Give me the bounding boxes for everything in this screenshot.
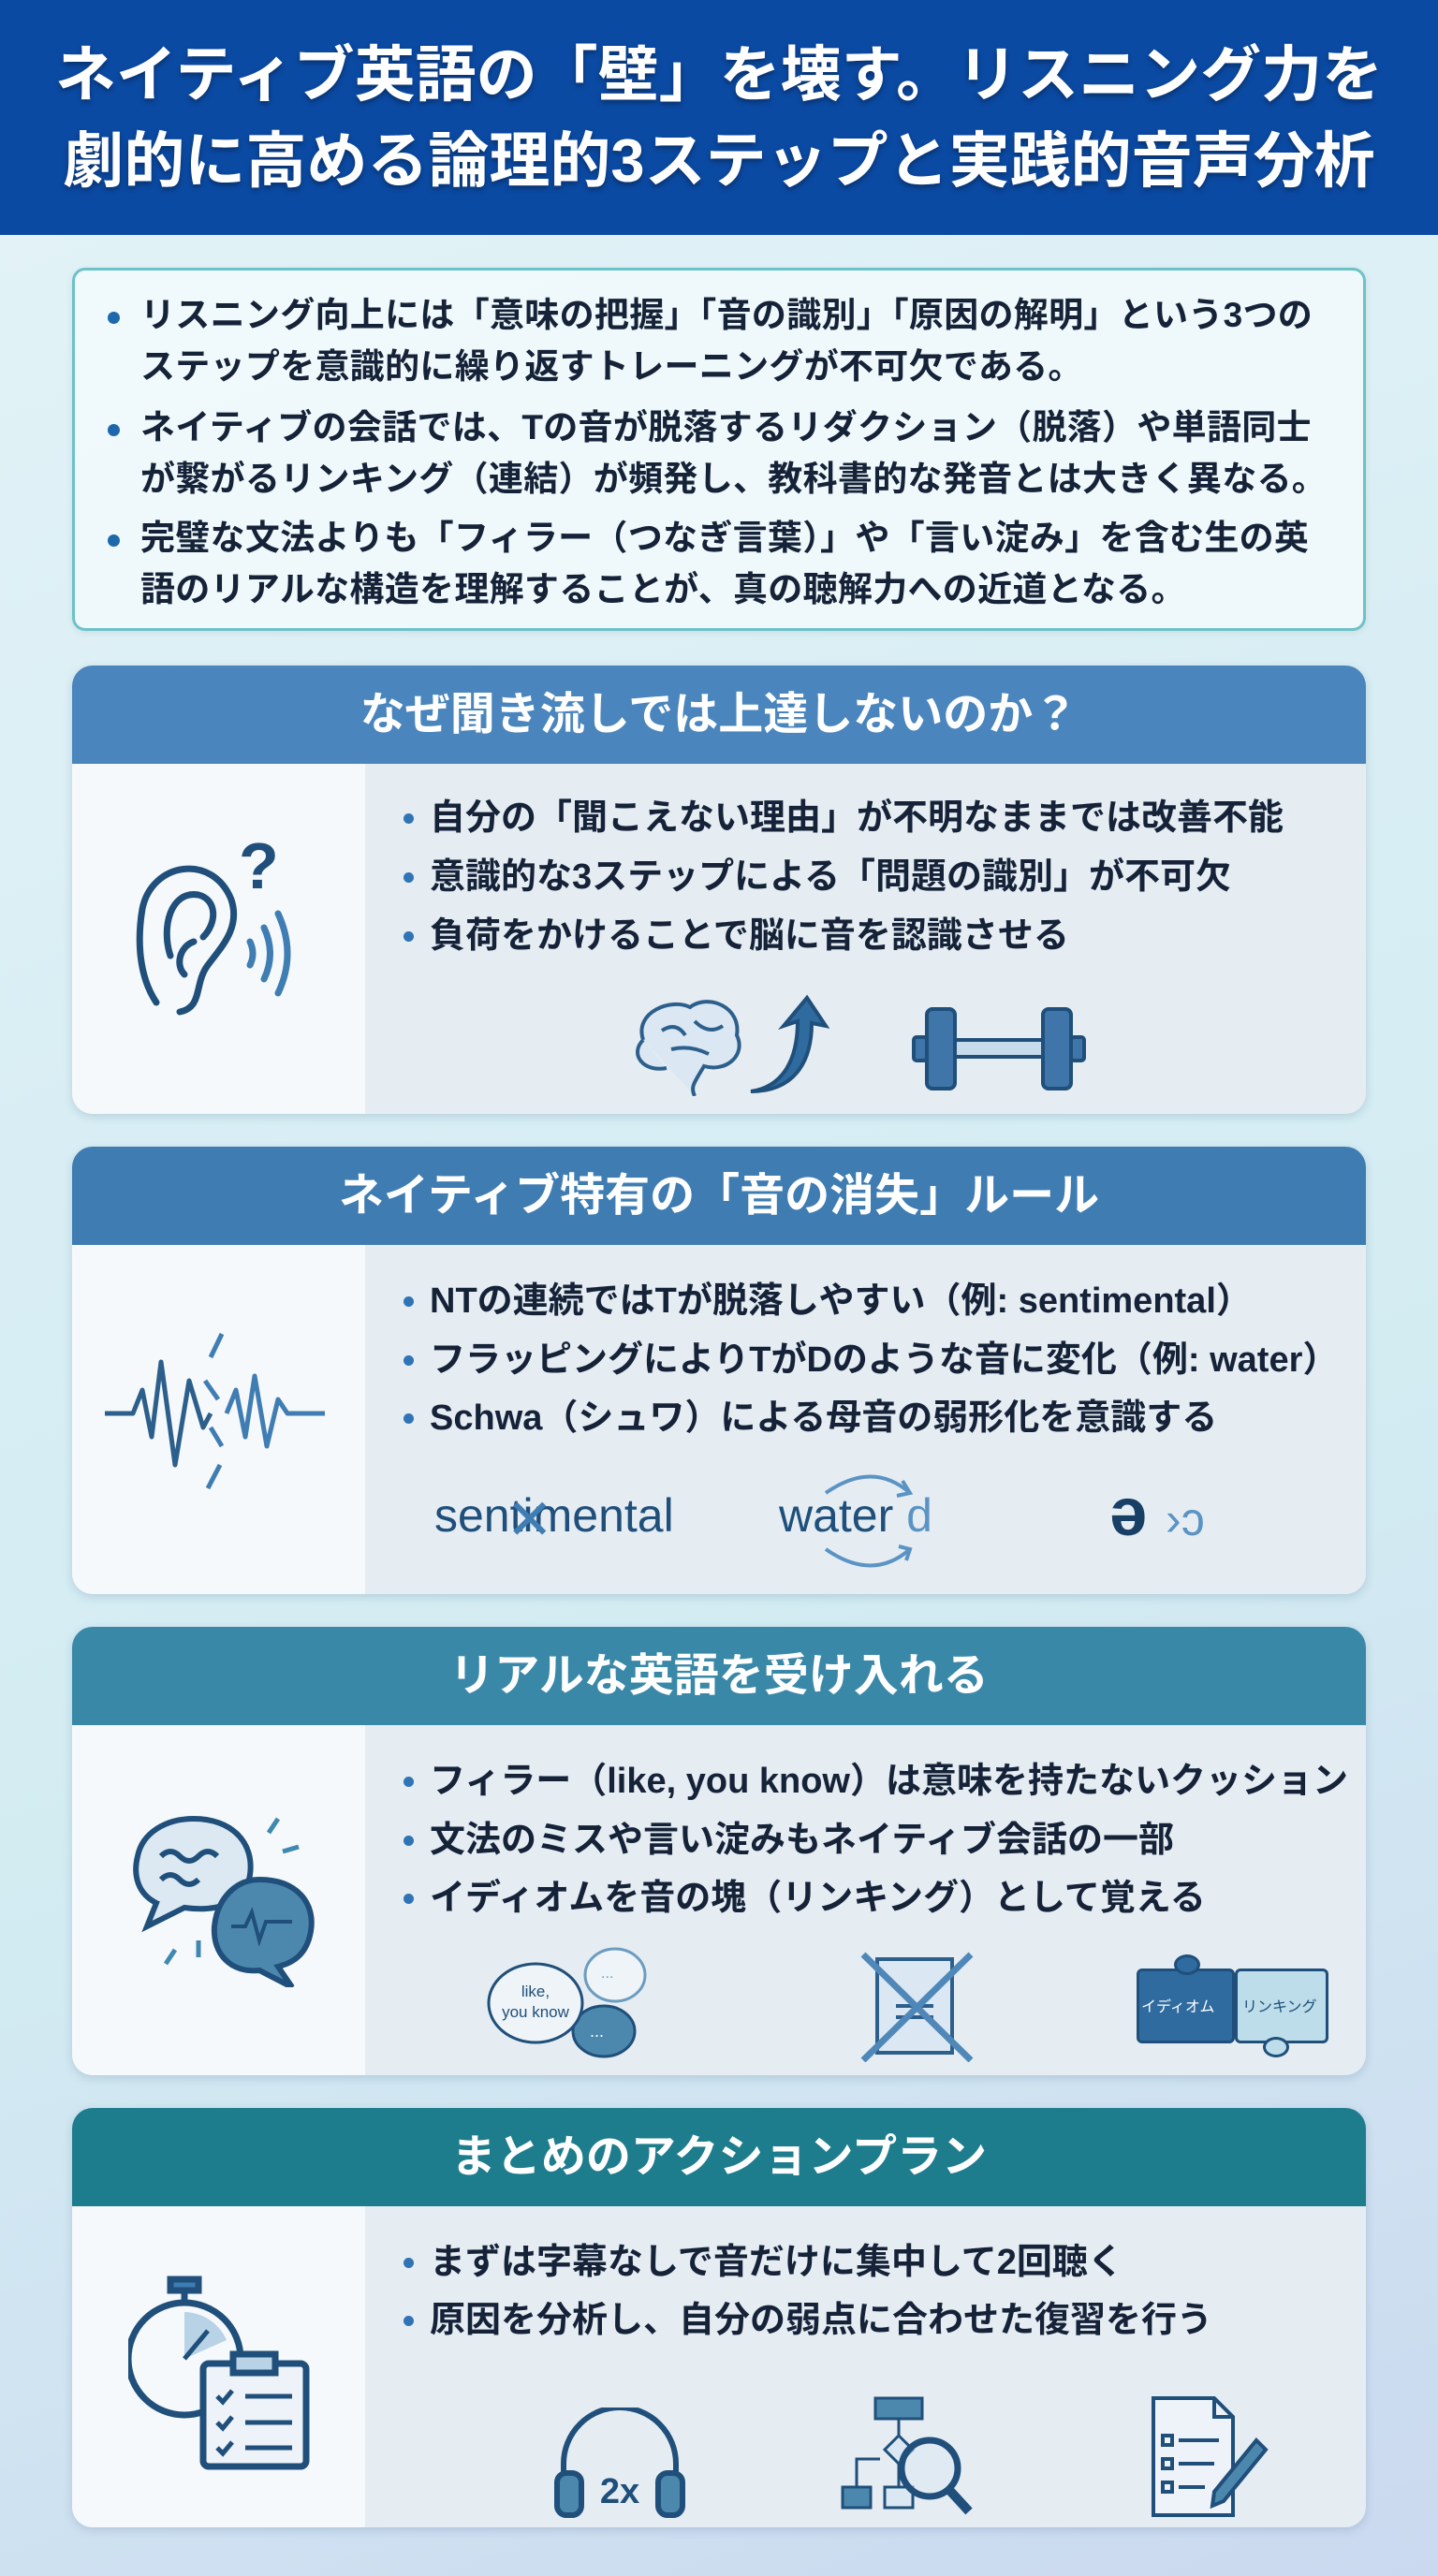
icon: brain with arrow [636, 994, 829, 1096]
icon: broken sound wave [105, 1333, 325, 1490]
icon: puzzle idiom linking [1137, 1954, 1328, 2057]
example: water d [779, 1475, 932, 1567]
summary box: ステップを意識的に繰り返すトレーニングが不可欠である。 [140, 347, 1083, 386]
panel: action plan [72, 2108, 1366, 2527]
bullet: イディオムを音の塊（リンキング）として覚える [430, 1879, 1206, 1918]
icon: dumbbell [912, 1007, 1086, 1090]
title [0, 0, 1438, 235]
summary box: 語のリアルな構造を理解することが、真の聴解力への近道となる。 [140, 570, 1186, 608]
icon: puzzle idiom linking: リンキング [1242, 1999, 1317, 2015]
example: water d: water d [779, 1489, 932, 1542]
panel heading [72, 666, 1366, 764]
icon: filler bubbles: ... [601, 1966, 613, 1982]
summary bullet 2 [108, 408, 1327, 498]
bullet: 負荷をかけることで脳に音を認識させる [430, 916, 1069, 956]
panel heading: ネイティブ特有の「音の消失」ルール [339, 1171, 1099, 1221]
summary bullet 1 [108, 296, 1313, 386]
bullet: 文法のミスや言い淀みもネイティブ会話の一部 [430, 1821, 1174, 1860]
panel: why passive listening fails [72, 666, 1366, 1114]
bullet: 自分の「聞こえない理由」が不明なままでは改善不能 [430, 798, 1284, 838]
bullet: Schwa（シュワ）による母音の弱形化を意識する [430, 1398, 1217, 1438]
icon: headphones 2x: 2x [600, 2472, 639, 2511]
icon: stopwatch and checklist [128, 2276, 309, 2469]
icon: headphones 2x [554, 2408, 685, 2518]
example: sentimental: ✕ [506, 1488, 553, 1551]
icon: ear with question [137, 834, 290, 1015]
icon: flowchart with magnifier [841, 2396, 973, 2514]
panel heading: まとめのアクションプラン [451, 2132, 987, 2182]
bullet: NTの連続ではTが脱落しやすい（例: sentimental） [430, 1281, 1252, 1321]
summary box: リスニング向上には「意味の把握」「音の識別」「原因の解明」という3つの [140, 296, 1313, 334]
icon: filler bubbles: ... [590, 2022, 604, 2041]
summary box: 完璧な文法よりも「フィラー（つなぎ言葉）」や「言い淀み」を含む生の英 [140, 519, 1309, 557]
panel: accept real English [72, 1627, 1366, 2075]
summary bullet 3 [108, 519, 1309, 608]
summary box [72, 268, 1366, 631]
example: schwa: ə ›ɔ [1109, 1475, 1205, 1550]
title: 劇的に高める論理的3ステップと実践的音声分析 [63, 126, 1375, 195]
panel heading: リアルな英語を受け入れる [449, 1651, 989, 1701]
icon: filler bubbles: you know [502, 2003, 570, 2021]
icon: filler bubbles: like, [521, 1983, 550, 2000]
panel heading [72, 2108, 1366, 2206]
bullet: 意識的な3ステップによる「問題の識別」が不可欠 [430, 857, 1231, 897]
panel heading: なぜ聞き流しでは上達しないのか？ [360, 690, 1078, 739]
icon: speech bubbles [133, 1816, 315, 1987]
bullet: フラッピングによりTがDのような音に変化（例: water） [430, 1340, 1338, 1380]
panel heading [72, 1627, 1366, 1725]
bullet: 原因を分析し、自分の弱点に合わせた復習を行う [430, 2301, 1212, 2340]
summary box: が繋がるリンキング（連結）が頻発し、教科書的な発音とは大きく異なる。 [140, 460, 1327, 498]
example: sentimental: sentimental [434, 1489, 674, 1542]
icon: filler bubbles [487, 1947, 646, 2057]
icon: document with pencil [1152, 2396, 1269, 2517]
panel heading [72, 1147, 1366, 1245]
bullet: まずは字幕なしで音だけに集中して2回聴く [430, 2243, 1123, 2282]
icon: puzzle idiom linking: イディオム [1141, 1999, 1214, 2015]
icon: crossed-out grammar book [861, 1953, 974, 2062]
title: ネイティブ英語の「壁」を壊す。リスニング力を [55, 40, 1383, 109]
summary box: ネイティブの会話では、Tの音が脱落するリダクション（脱落）や単語同士 [140, 408, 1312, 446]
bullet: フィラー（like, you know）は意味を持たないクッション [430, 1762, 1348, 1801]
panel: sound disappearance rules [72, 1147, 1366, 1594]
